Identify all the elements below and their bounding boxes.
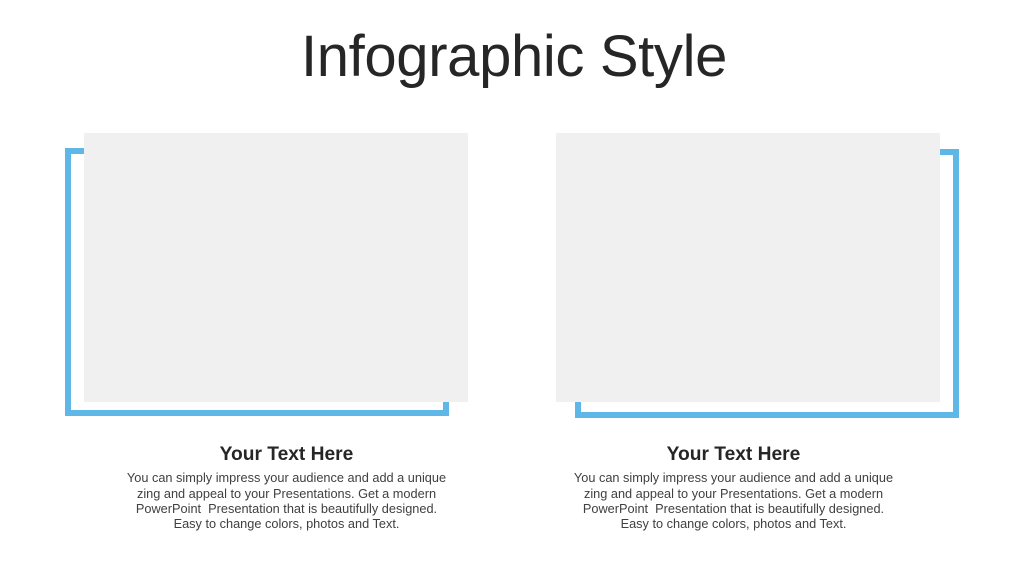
right grey image placeholder bbox=[556, 133, 940, 402]
right caption heading: Your Text Here bbox=[667, 444, 800, 465]
left blue offset frame bbox=[65, 148, 449, 416]
left caption body: You can simply impress your audience and add a unique zing and appeal to your Presentations. Get a modern PowerPoint Presentation that is beautifully designed. Easy to change colors, photos and Text. bbox=[127, 470, 446, 531]
right blue offset frame bbox=[575, 149, 959, 418]
left grey image placeholder bbox=[84, 133, 468, 402]
text block: left caption bbox=[127, 444, 446, 531]
left caption heading: Your Text Here bbox=[220, 444, 353, 465]
panel: left image card bbox=[65, 133, 468, 416]
panel: right image card bbox=[556, 133, 959, 418]
right caption body: You can simply impress your audience and add a unique zing and appeal to your Presentations. Get a modern PowerPoint Presentation that is beautifully designed. Easy to change colors, photos and Text. bbox=[574, 470, 893, 531]
title: Infographic Style bbox=[301, 24, 727, 89]
text block: right caption bbox=[574, 444, 893, 531]
